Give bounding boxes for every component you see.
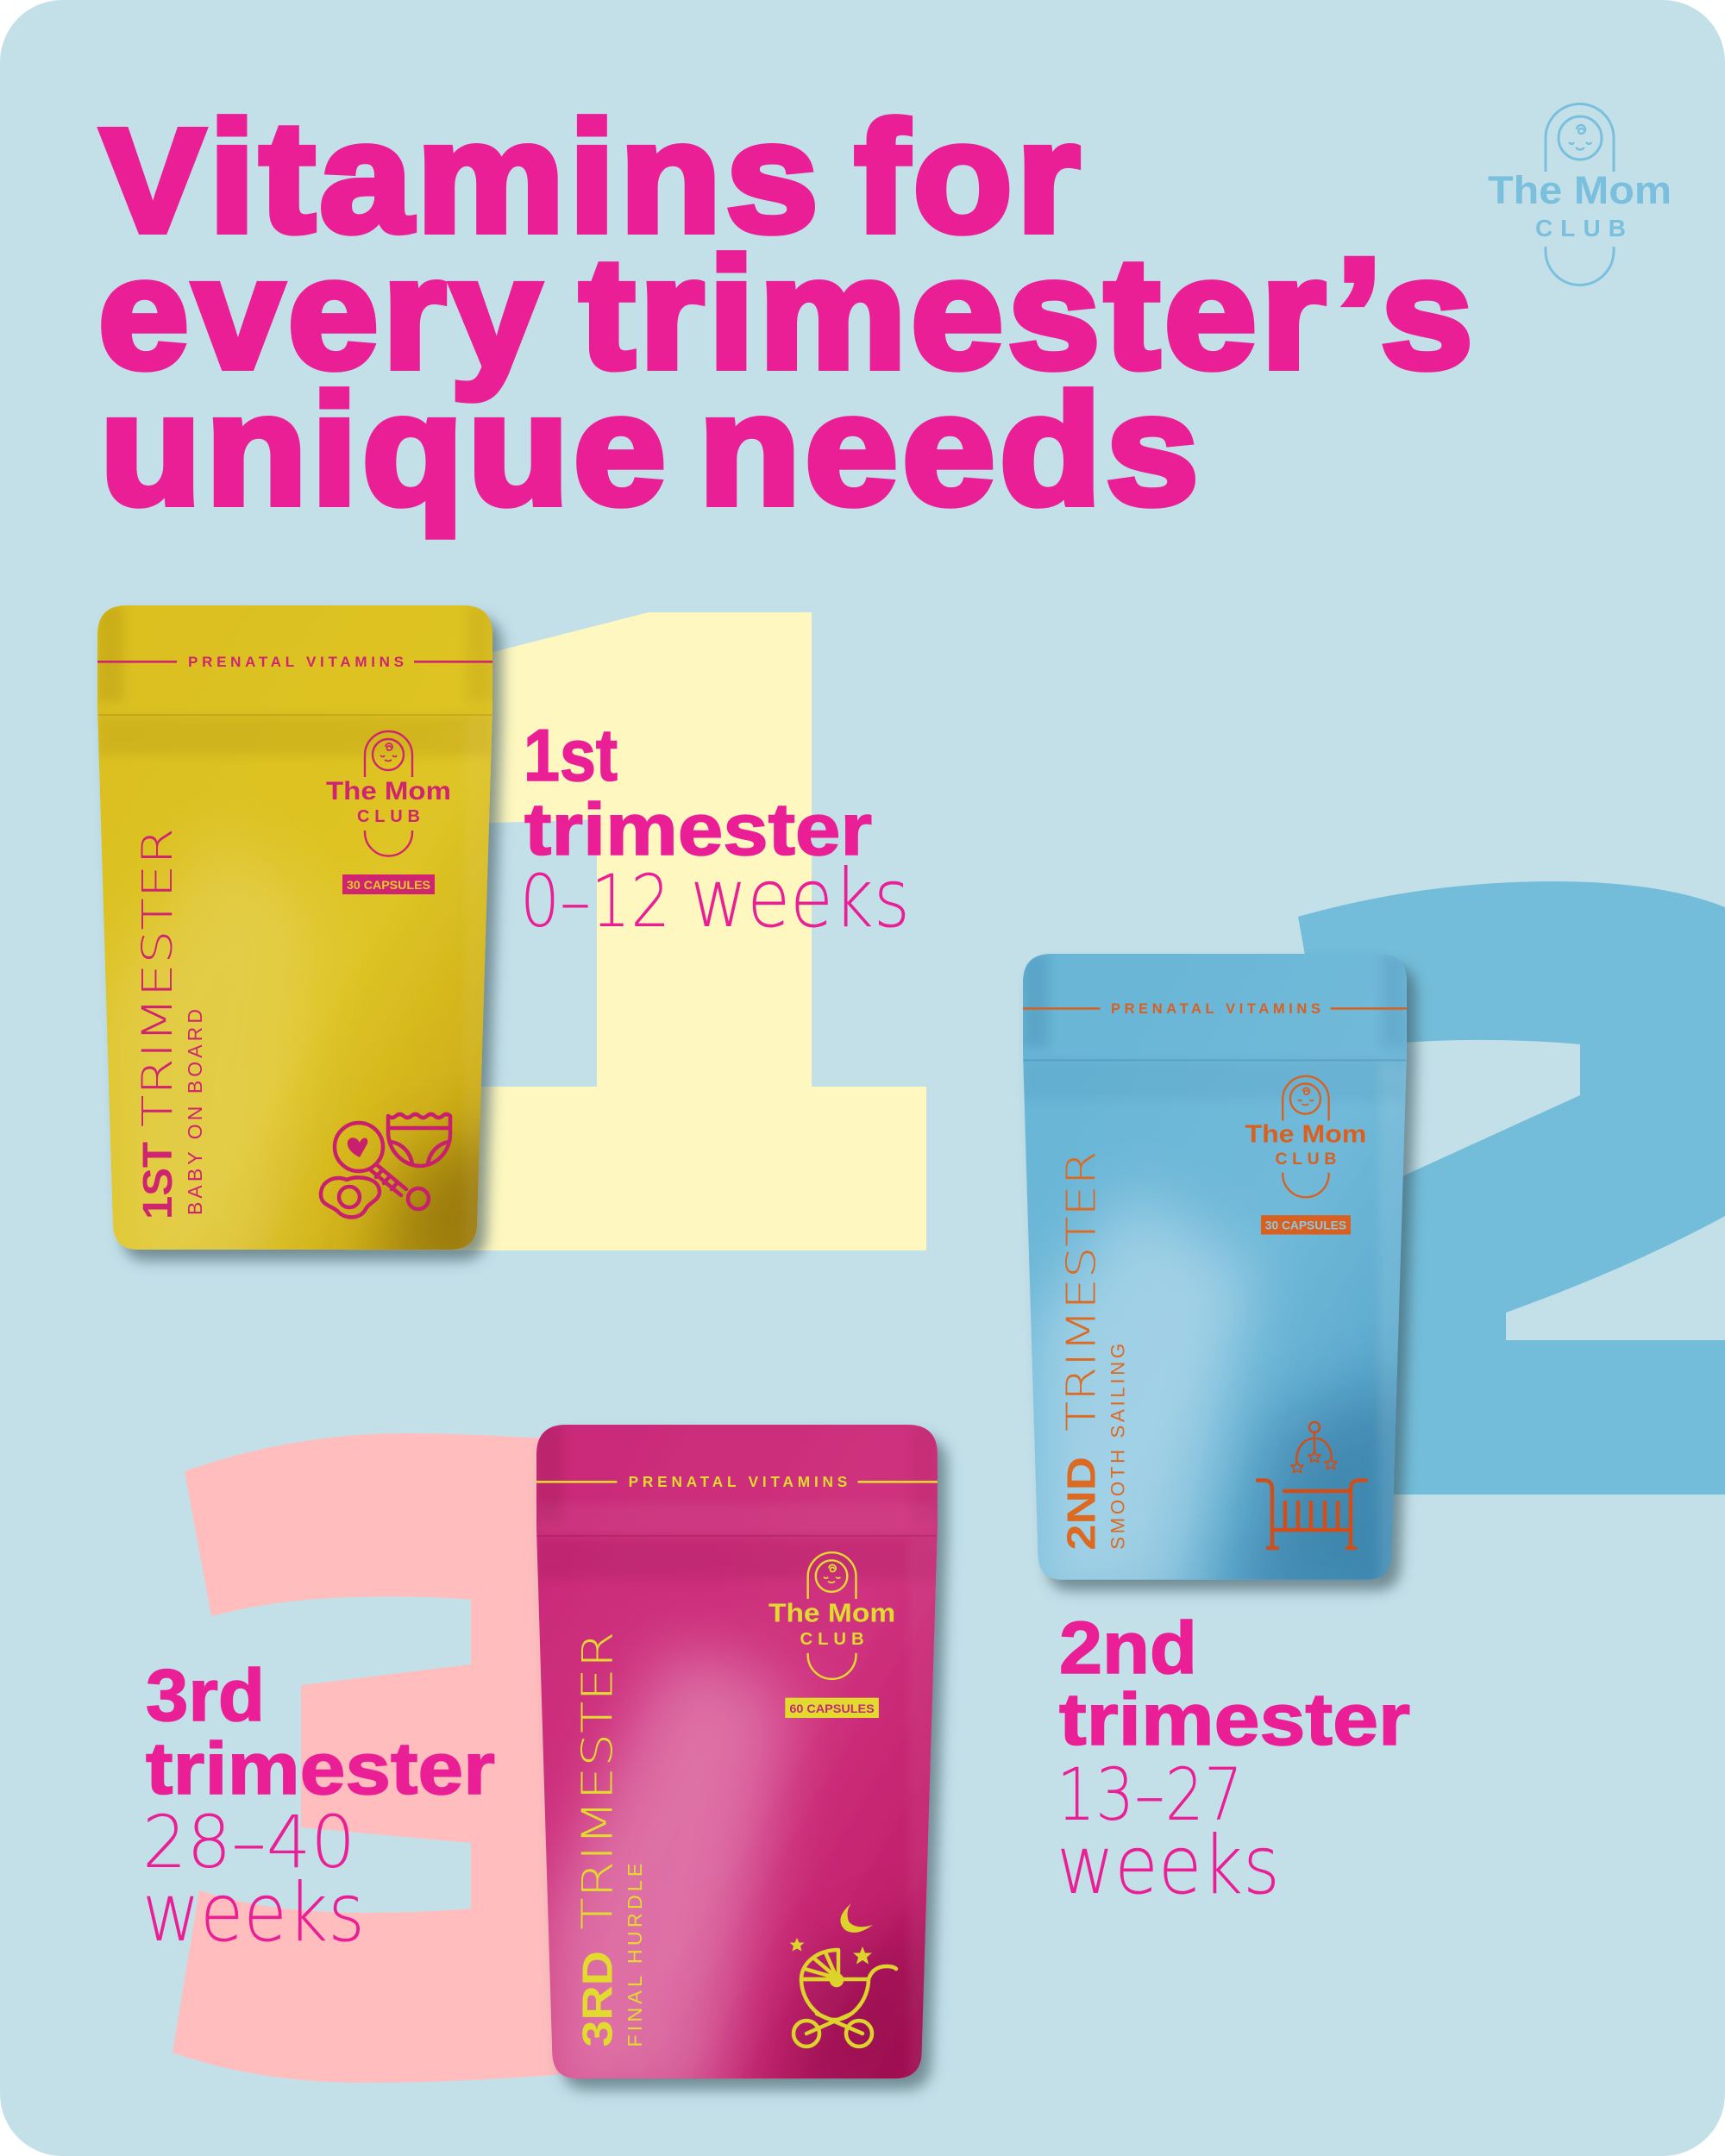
title: trimester’s	[580, 225, 1477, 401]
icons: crib and mobile	[1258, 1422, 1366, 1548]
vertical trimester name: 3RD	[574, 1951, 621, 2047]
title	[98, 89, 1477, 537]
pouch logo	[1245, 1076, 1366, 1197]
vertical tagline: BABY ON BOARD	[184, 1009, 206, 1215]
vertical trimester name: 1ST	[135, 1142, 181, 1219]
tear line with prenatal vitamins label: PRENATAL VITAMINS	[188, 654, 404, 670]
text: 1st trimester: trimester	[524, 789, 872, 871]
logo: The Mom Club	[1488, 103, 1672, 285]
capsule count badge	[785, 1698, 879, 1718]
text: 1st trimester	[520, 715, 910, 946]
capsule count badge	[342, 874, 435, 894]
capsule count badge: 60 CAPSULES	[789, 1702, 875, 1716]
pouch body	[536, 1425, 938, 2078]
tear line with prenatal vitamins label: PRENATAL VITAMINS	[629, 1473, 847, 1490]
logo: The Mom Club: The Mom	[1488, 168, 1672, 212]
pouch logo	[768, 1552, 895, 1679]
pouch shading	[536, 1425, 948, 2116]
text: 1st trimester: 0–12 weeks	[520, 852, 910, 946]
text: 3rd trimester: 3rd	[146, 1655, 265, 1737]
text: 3rd trimester	[142, 1655, 495, 1960]
text: 2nd trimester: 2nd	[1059, 1608, 1197, 1689]
title: unique	[100, 361, 670, 537]
vertical tagline: FINAL HURDLE	[624, 1864, 646, 2047]
big numeral 3	[172, 1433, 690, 2083]
pouch logo: The Mom	[1245, 1121, 1366, 1149]
pouch logo	[326, 731, 451, 856]
title: every	[98, 225, 545, 401]
vertical trimester name	[1058, 1150, 1105, 1551]
text: 2nd trimester	[1057, 1608, 1410, 1913]
vertical tagline: SMOOTH SAILING	[1107, 1344, 1129, 1550]
product pouch: 3rd trimester	[536, 1425, 948, 2116]
pouch body	[97, 605, 492, 1250]
vertical trimester name: TRIMESTER	[1058, 1150, 1105, 1432]
text: 2nd trimester: weeks	[1057, 1819, 1280, 1913]
capsule count badge: 30 CAPSULES	[1265, 1219, 1346, 1232]
pouch body	[1023, 954, 1407, 1580]
pouch logo: The Mom	[768, 1598, 895, 1627]
vertical trimester name: 2ND	[1059, 1457, 1104, 1551]
pouch logo: CLUB	[357, 807, 420, 826]
logo: The Mom Club: CLUB	[1535, 215, 1626, 241]
pouch logo: The Mom	[326, 777, 451, 805]
big numeral 1	[345, 612, 926, 1250]
capsule count badge	[1261, 1215, 1351, 1234]
tear line with prenatal vitamins label: PRENATAL VITAMINS	[1111, 1001, 1320, 1017]
vertical trimester name: TRIMESTER	[134, 828, 182, 1127]
text: 3rd trimester: weeks	[142, 1866, 365, 1960]
pouch shading	[97, 606, 492, 1250]
title: Vitamins	[101, 89, 823, 265]
capsule count badge: 30 CAPSULES	[347, 878, 430, 892]
product pouch: 1st trimester	[97, 605, 529, 1287]
icons: rattle, diaper, egg	[321, 1114, 450, 1217]
pouch shading	[1023, 954, 1417, 1616]
vertical trimester name	[574, 1632, 622, 2047]
vertical trimester name	[134, 828, 182, 1219]
pouch logo: CLUB	[800, 1630, 864, 1649]
title: needs	[699, 361, 1203, 537]
title: for	[855, 89, 1084, 265]
text: 1st trimester: 1st	[524, 715, 618, 797]
pouch logo: CLUB	[1275, 1150, 1336, 1169]
text: 2nd trimester: 13–27	[1057, 1752, 1243, 1837]
text: 3rd trimester: 28–40	[142, 1800, 355, 1884]
text: 2nd trimester: trimester	[1059, 1679, 1410, 1761]
text: 3rd trimester: trimester	[146, 1728, 495, 1810]
vertical trimester name: TRIMESTER	[574, 1632, 622, 1930]
icons: stroller, moon, stars	[789, 1903, 896, 2046]
big numeral 2	[1208, 881, 1725, 1495]
product pouch: 2nd trimester	[1023, 954, 1417, 1616]
